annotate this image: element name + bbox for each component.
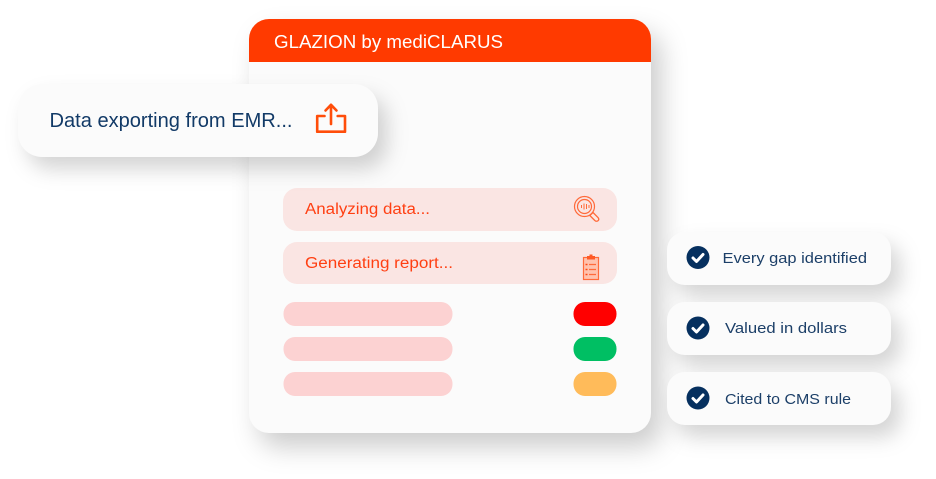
- status row: analyzing data: [283, 188, 617, 231]
- icon: check: [686, 316, 710, 340]
- icon: clipboard: [584, 254, 598, 280]
- severity pills: [574, 302, 616, 396]
- panel: cited to CMS rule: [667, 372, 891, 425]
- header bar: [249, 19, 651, 62]
- icon: check: [686, 386, 710, 410]
- panel: every gap identified: Every gap identified: [722, 250, 867, 267]
- panel: every gap identified: [667, 232, 891, 285]
- heading: GLAZION by mediCLARUS: [274, 32, 503, 52]
- card body: [249, 19, 651, 433]
- panel: data exporting callout: [18, 84, 378, 157]
- status row: analyzing data: Analyzing data...: [305, 201, 430, 218]
- panel: cited to CMS rule: Cited to CMS rule: [725, 391, 851, 408]
- panel: GLAZION main card: [249, 19, 651, 433]
- panel: valued in dollars: [667, 302, 891, 355]
- panel: valued in dollars: Valued in dollars: [725, 320, 847, 337]
- icon: upload/share: [317, 105, 345, 132]
- placeholder bars: [284, 302, 452, 396]
- status row: generating report: [283, 242, 617, 284]
- status row: generating report: Generating report...: [305, 255, 453, 272]
- icon: magnifying glass: [574, 196, 599, 221]
- icon: check: [686, 246, 710, 269]
- panel: data exporting callout: Data exporting from EMR...: [50, 110, 292, 132]
